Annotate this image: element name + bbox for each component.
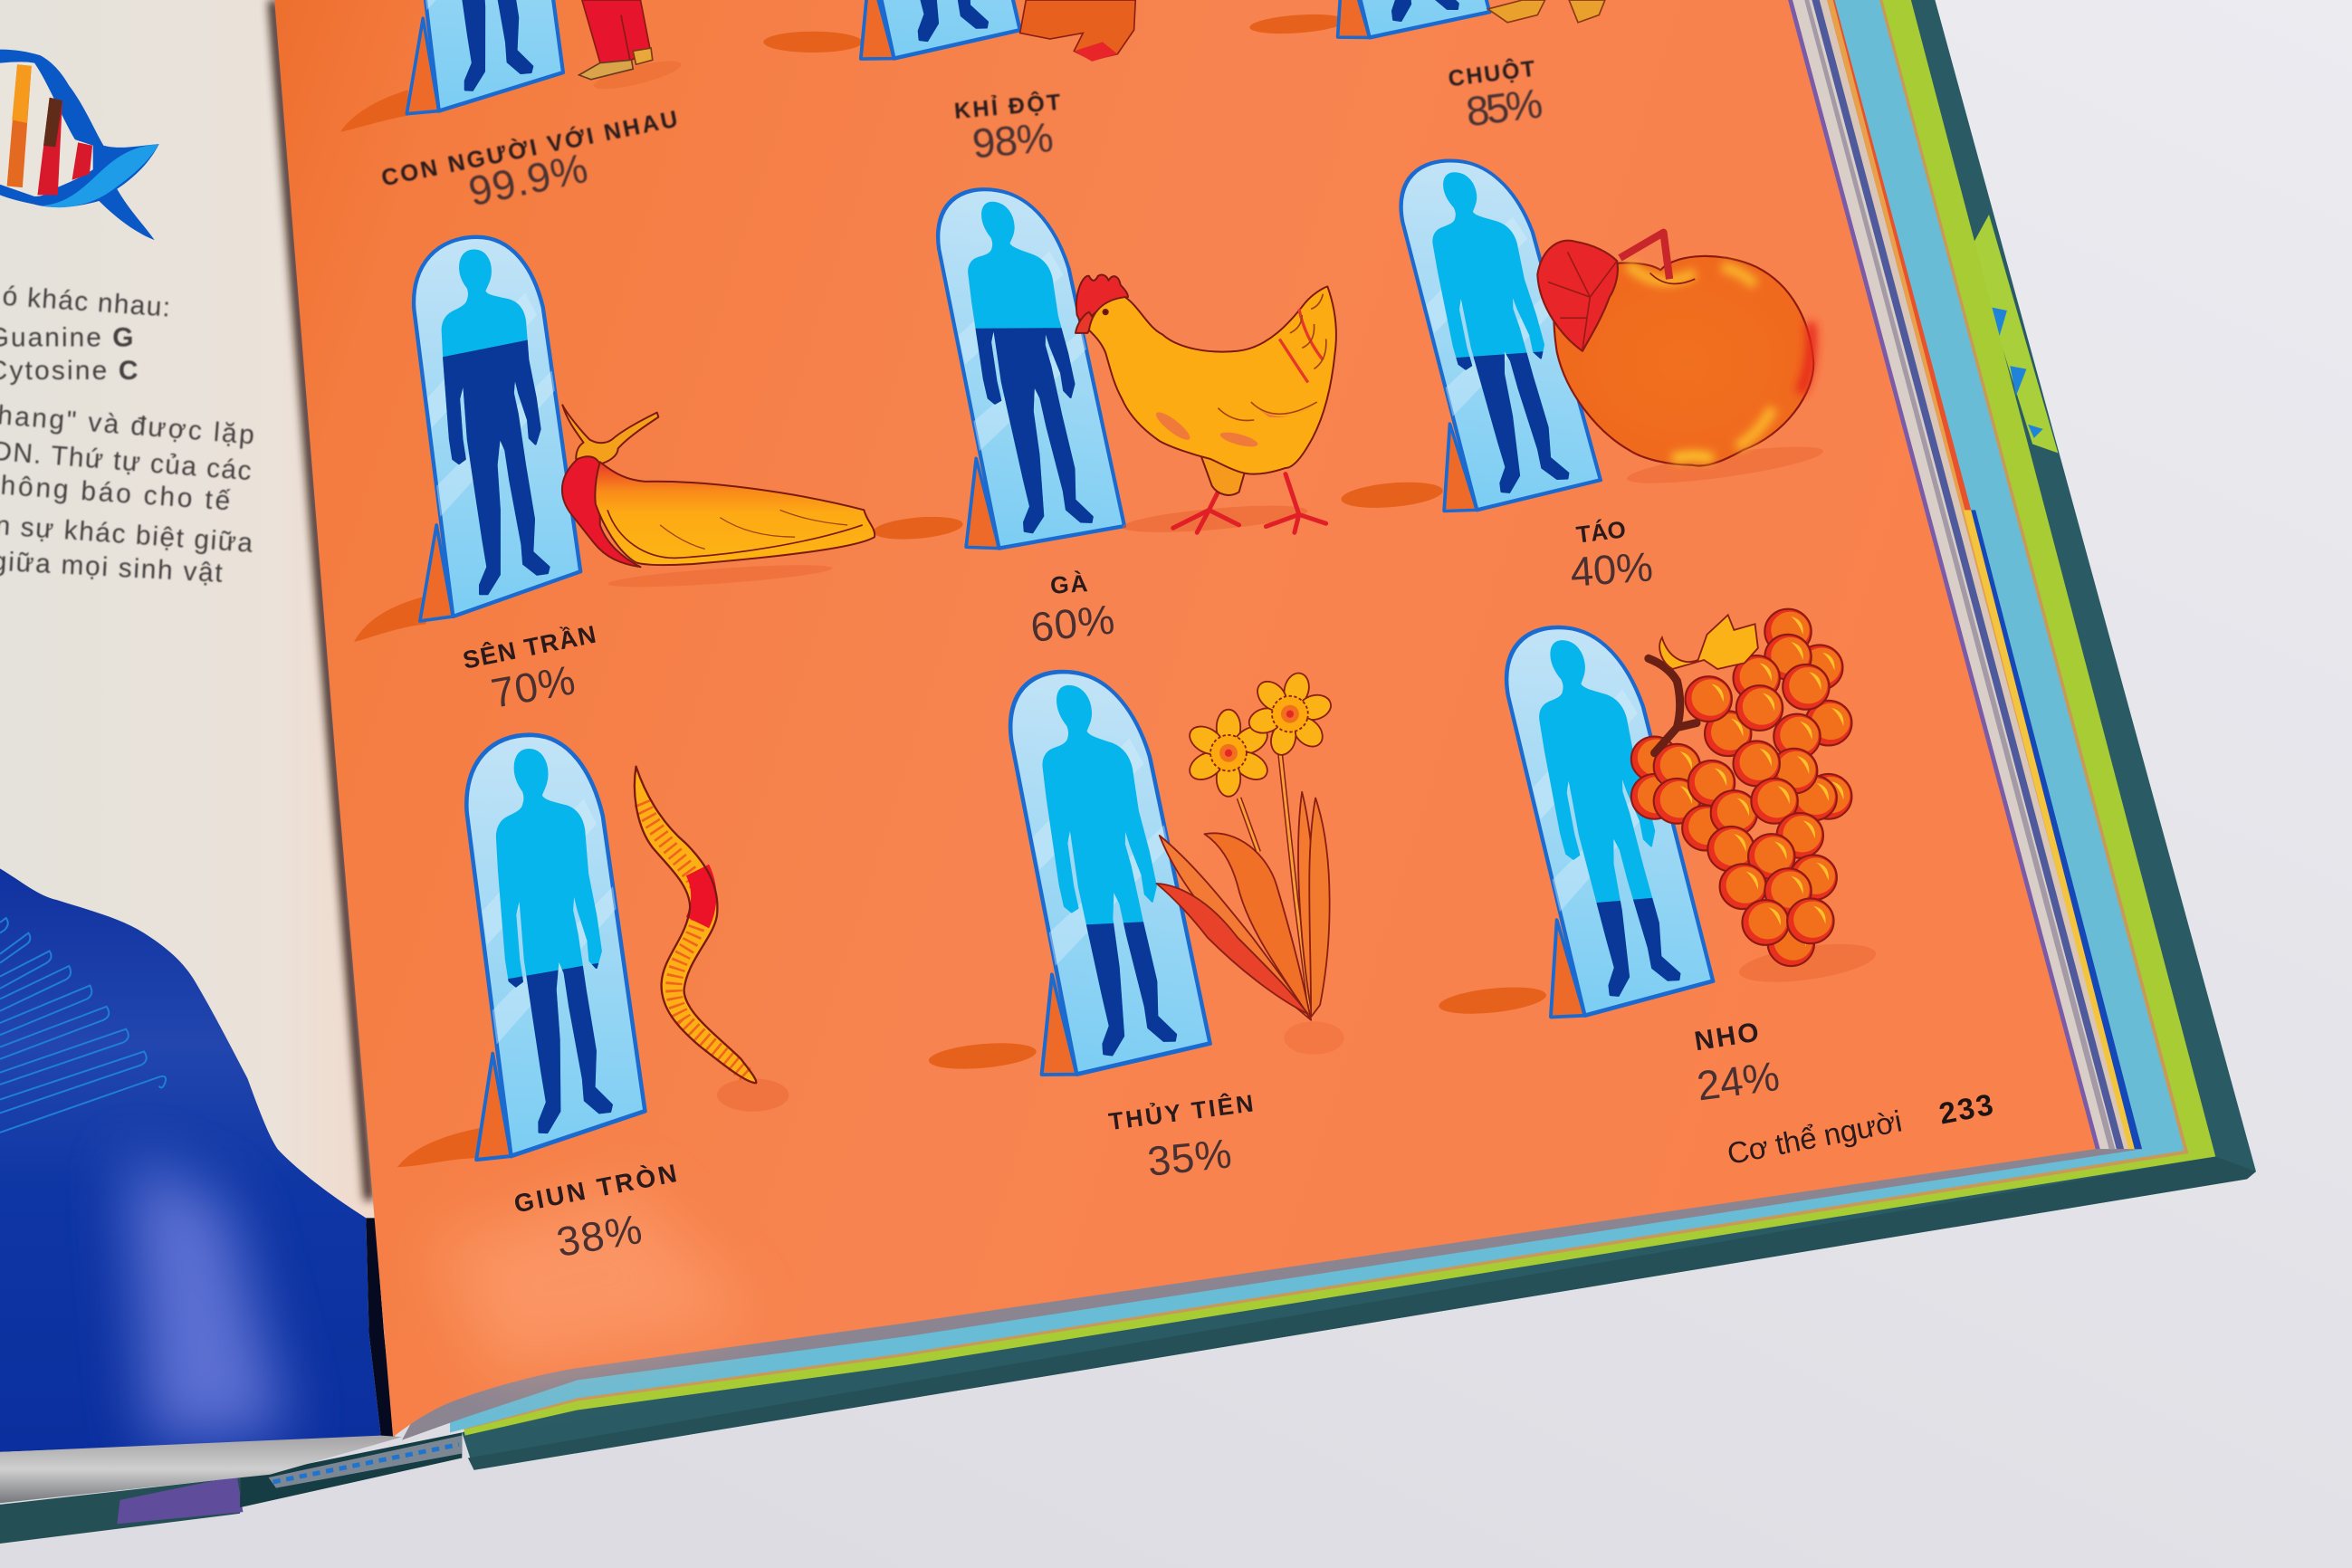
page edge: sky blue with orange trim [450,0,2188,1432]
label: thủy tiên 35%: 35% [1145,1130,1234,1185]
mirror shadows on the page [340,12,1547,1167]
illustration: daffodil [1156,663,1344,1055]
left page text fragments [0,282,255,588]
left page [0,0,395,1470]
figure: giun tròn mirror [466,732,645,1166]
label: gà 60%: 60% [1028,597,1117,651]
label: giun tròn 38%: 38% [553,1206,645,1266]
soft highlight near lower spine [435,1185,750,1372]
label: chuột 85%: CHUỘT [1447,54,1536,91]
flower left [1185,710,1272,797]
label: táo 40% [1569,515,1654,596]
figure: nho mirror [1499,622,1719,1032]
left page text fragments: n sự khác biệt giữa [0,511,254,559]
label: nho 24% [1692,1018,1782,1109]
label: táo 40%: TÁO [1574,515,1627,549]
flower right [1238,663,1342,766]
label: chuột 85% [1447,54,1545,135]
illustration: mouse [1488,0,1605,23]
blue wave on left page [0,868,381,1452]
illustration: slug [562,405,875,591]
label: gà 60%: GÀ [1049,569,1088,599]
gutter shadow [273,0,369,1200]
left page DNA fish icon [0,50,159,240]
label: giun tròn 38%: GIUN TRÒN [512,1159,679,1218]
grape leaf [1659,615,1758,669]
figure: táo mirror [1394,156,1606,526]
figure: sên trần mirror [414,237,580,621]
footer: page number: 233 [1936,1088,1996,1132]
stitched headband [269,1436,462,1488]
illustration: apple [1537,233,1825,491]
footer: section name: Cơ thể người [1725,1104,1905,1171]
label: sên trần 70% [460,620,598,717]
figure: chuột [1336,0,1492,40]
label: sên trần 70%: 70% [488,656,578,717]
label: chuột 85%: 85% [1464,80,1545,135]
illustration: person red trousers [579,0,684,95]
label: con người với nhau 99.9%: CON NGƯỜI VỚI NHAU [379,105,680,191]
label: nho 24%: 24% [1694,1053,1782,1109]
label: giun tròn 38% [512,1159,679,1266]
grape stem [1649,658,1697,753]
back cover purple artwork [117,1476,243,1524]
figure: thủy tiên mirror [1006,664,1214,1096]
illustration: grapes [1631,609,1879,989]
figure: khỉ đột [858,0,1021,61]
label: con người với nhau 99.9%: 99.9% [464,145,591,215]
spine and lower left page block [0,1432,462,1544]
label: thủy tiên 35% [1107,1089,1255,1185]
hardcover teal cover [462,0,2256,1470]
endpaper edge: lime [450,0,2215,1436]
figure: gà mirror [933,180,1128,573]
label: khỉ đột 98%: KHỈ ĐỘT [953,88,1062,124]
illustration: chicken [1076,275,1336,538]
hairpin contour lines [0,918,166,1133]
label: thủy tiên 35%: THỦY TIÊN [1107,1089,1255,1135]
cover artwork: lime patch with blue triangles [1971,215,2058,453]
figure: con người với nhau [401,0,564,122]
label: sên trần 70%: SÊN TRẦN [460,620,598,674]
label: gà 60% [1028,569,1117,651]
illustration: gorilla [1020,0,1135,62]
label: khỉ đột 98% [953,88,1062,167]
label: nho 24%: NHO [1692,1018,1761,1056]
illustration: roundworm [635,767,789,1112]
label: khỉ đột 98%: 98% [970,114,1055,167]
page stack along right edge [402,0,2142,1440]
label: táo 40%: 40% [1569,543,1654,596]
left page text fragments: ó khác nhau: [2,282,171,323]
orange right page [274,0,2096,1437]
